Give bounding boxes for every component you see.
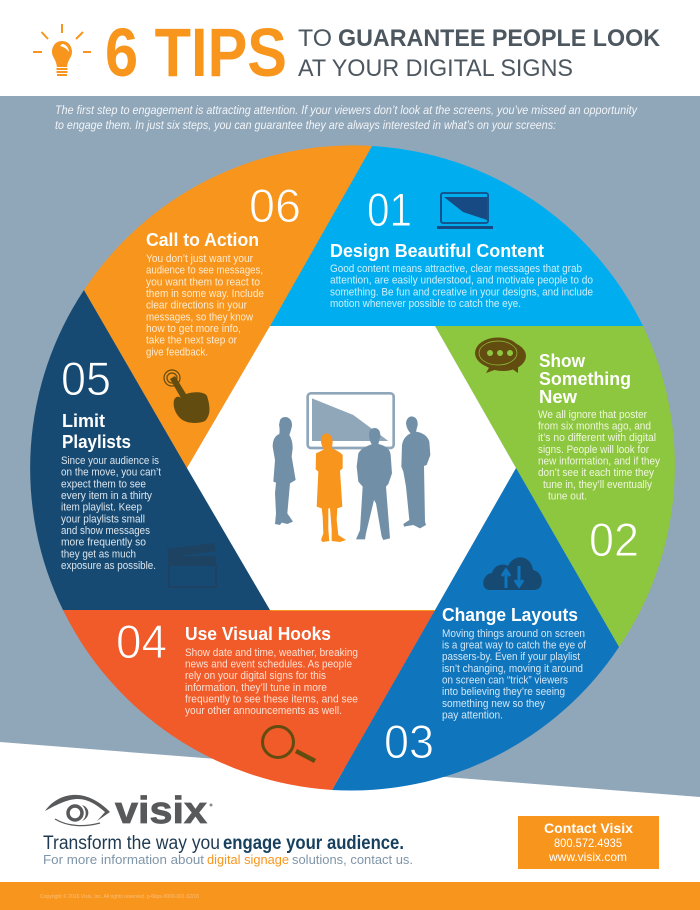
icon: light bulb xyxy=(33,24,91,75)
panel: 02 show something new xyxy=(435,326,675,647)
icon: laptop xyxy=(437,193,493,229)
panel: 02 show something new: it’s no different with digital xyxy=(538,432,656,444)
footer band xyxy=(0,882,700,910)
panel: 02 show something new: Something xyxy=(539,369,631,389)
panel: 06 call to action: clear directions in your xyxy=(146,300,247,312)
panel: 04 use visual hooks: Show date and time, weather, breaking xyxy=(185,647,358,659)
panel: 05 limit playlists: on the move, you can’t xyxy=(61,467,161,479)
title: TO xyxy=(298,25,332,52)
panel: 06 call to action: You don’t just want your xyxy=(146,253,253,265)
panel: 02 show something new: tune in, they’ll eventually xyxy=(543,479,652,491)
icon: clapperboard xyxy=(167,543,216,587)
panel: 05 limit playlists: expect them to see xyxy=(61,478,146,490)
panel: 05 limit playlists: your playlists small xyxy=(61,513,145,525)
panel: 02 show something new: New xyxy=(539,387,578,407)
panel: 04 use visual hooks: 04 xyxy=(116,615,167,668)
panel: 03 change layouts: something new so they xyxy=(442,698,545,710)
man silhouette xyxy=(356,428,392,540)
panel: 05 limit playlists: every item in a thirty xyxy=(61,490,152,502)
center hexagon xyxy=(187,326,516,610)
panel: 05 limit playlists: item playlist. Keep xyxy=(61,502,142,514)
panel: 03 change layouts: is a great way to catch the eye of xyxy=(442,640,587,652)
panel: 06 call to action: them in some way. Include xyxy=(146,288,264,300)
panel: 04 use visual hooks: rely on your digital signs for this xyxy=(185,670,326,682)
panel: 02 show something new: new information, and if they xyxy=(538,456,660,468)
panel: 03 change layouts: Change Layouts xyxy=(442,605,578,625)
panel: 05 limit playlists: Playlists xyxy=(62,432,131,452)
center orange woman silhouette xyxy=(316,433,346,542)
panel: 06 call to action: how to get more info, xyxy=(146,323,241,335)
panel: 04 use visual hooks: Use Visual Hooks xyxy=(185,624,331,644)
panel: 03 change layouts: pay attention. xyxy=(442,710,503,722)
panel: 04 use visual hooks: news and event schedules. As people xyxy=(185,659,352,671)
tagline xyxy=(43,833,413,867)
panel: 01 design beautiful content: Good content means attractive, clear messages that grab xyxy=(330,263,582,275)
panel: 04 use visual hooks xyxy=(63,610,435,790)
panel: 01 design beautiful content: Design Beautiful Content xyxy=(330,241,544,261)
visix logo: visix xyxy=(115,790,207,832)
panel: 03 change layouts: into believing they’re seeing xyxy=(442,686,565,698)
intro text: The first step to engagement is attracting attention. If your viewers don’t look at the screens, you’ve missed an opportunity xyxy=(55,103,638,117)
panel: 05 limit playlists: more frequently so xyxy=(61,537,146,549)
panel: 02 show something new: don’t see it each time they xyxy=(538,467,654,479)
panel: 02 show something new: from six months ago, and xyxy=(538,421,651,433)
panel: 05 limit playlists: Since your audience is xyxy=(61,455,159,467)
screen xyxy=(308,393,394,448)
contact box xyxy=(518,816,659,869)
panel: 05 limit playlists: they get as much xyxy=(61,548,136,560)
panel: 03 change layouts: on screen can “trick” viewers xyxy=(442,675,568,687)
intro text: to engage them. In just six steps, you can guarantee they are always interested in what’s on your screens: xyxy=(55,118,556,132)
panel: 01 design beautiful content: motion whenever possible to catch the eye. xyxy=(330,298,521,310)
tagline: For more information about xyxy=(43,852,204,867)
tagline: solutions, contact us. xyxy=(292,852,413,867)
visix logo xyxy=(45,790,212,832)
panel: 02 show something new: 02 xyxy=(589,513,639,566)
gray background band xyxy=(0,96,700,797)
panel: 05 limit playlists: exposure as possible. xyxy=(61,560,156,572)
panel: 06 call to action: 06 xyxy=(249,179,301,232)
contact box: 800.572.4935 xyxy=(554,836,622,850)
panel: 03 change layouts: 03 xyxy=(384,715,434,768)
panel: 04 use visual hooks: information, they’ll tune in more xyxy=(185,682,327,694)
panel: 05 limit playlists: Limit xyxy=(62,411,105,431)
panel: 04 use visual hooks: frequently to see these items, and see xyxy=(185,694,358,706)
panel: 05 limit playlists xyxy=(30,290,270,610)
panel: 01 design beautiful content xyxy=(270,146,643,326)
icon: people looking at a screen xyxy=(273,393,430,542)
panel: 06 call to action: give feedback. xyxy=(146,346,208,358)
panel: 02 show something new: signs. People will look for xyxy=(538,444,649,456)
title: GUARANTEE PEOPLE LOOK xyxy=(338,25,661,52)
panel: 06 call to action: Call to Action xyxy=(146,230,259,250)
title xyxy=(105,14,661,91)
contact box: Contact Visix xyxy=(544,820,633,836)
panel: 03 change layouts xyxy=(332,468,619,791)
panel: 06 call to action: take the next step or xyxy=(146,335,237,347)
icon: cloud xyxy=(483,557,542,590)
panel: 03 change layouts: Moving things around on screen xyxy=(442,628,585,640)
icon: magnifying glass xyxy=(262,726,315,761)
panel: 01 design beautiful content: 01 xyxy=(367,183,412,236)
icon: speech bubbles xyxy=(475,338,526,373)
panel: 02 show something new: We all ignore that poster xyxy=(538,409,647,421)
tagline: Transform the way you xyxy=(43,833,220,854)
panel: 05 limit playlists: 05 xyxy=(61,352,111,405)
panel: 01 design beautiful content: something. Be fun and creative in your designs, and include xyxy=(330,286,593,298)
contact box: www.visix.com xyxy=(548,850,627,864)
panel: 06 call to action: audience to see messages, xyxy=(146,265,263,277)
left woman silhouette xyxy=(273,417,296,525)
panel: 06 call to action xyxy=(84,145,372,468)
panel: 06 call to action: messages, so they know xyxy=(146,311,253,323)
panel: 04 use visual hooks: your other announcements as well. xyxy=(185,705,342,717)
panel: 03 change layouts: passers-by. Even if your playlist xyxy=(442,651,580,663)
title: 6 TIPS xyxy=(105,14,287,91)
panel: 03 change layouts: isn’t changing, moving it around xyxy=(442,663,583,675)
tagline: digital signage xyxy=(207,852,289,867)
panel: 01 design beautiful content: attention, are easily understood, and motivate people to do xyxy=(330,275,593,287)
right man silhouette xyxy=(401,416,430,528)
icon: pointing hand xyxy=(164,370,209,423)
panel: 05 limit playlists: and show messages xyxy=(61,525,150,537)
panel: 02 show something new: tune out. xyxy=(548,491,587,503)
panel: 06 call to action: you want them to react to xyxy=(146,276,260,288)
panel: 02 show something new: Show xyxy=(539,351,586,371)
title: AT YOUR DIGITAL SIGNS xyxy=(298,55,573,82)
tagline: engage your audience. xyxy=(223,833,404,854)
footer band: Copyright © 2016 Visix, Inc. All rights reserved. p-6tips-0000-001 02/16 xyxy=(40,893,199,900)
intro text xyxy=(55,103,638,132)
